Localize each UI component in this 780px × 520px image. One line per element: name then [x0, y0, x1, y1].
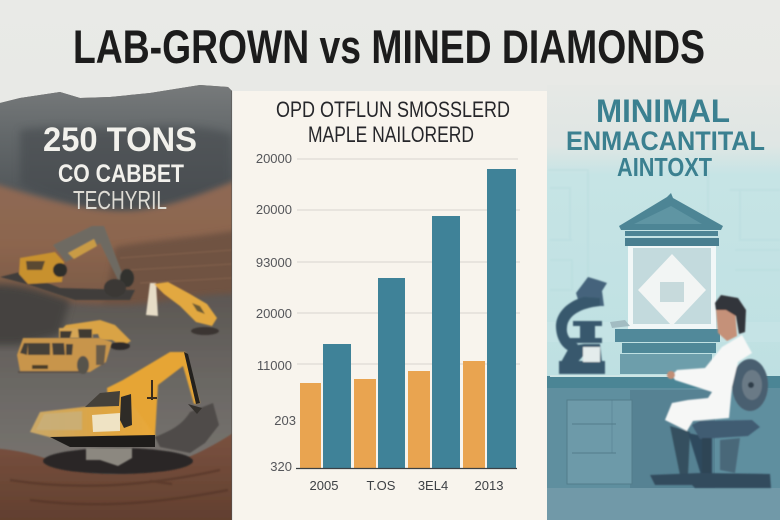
floor: [547, 488, 780, 520]
callout: minimal environmental: ENMACANTITAL: [566, 126, 765, 156]
gridlines: [297, 159, 520, 364]
excavator: large foreground: [30, 352, 219, 474]
x axis labels: 2005: [310, 478, 338, 493]
dirt pile: [155, 403, 219, 453]
quarry floor: [0, 293, 232, 458]
panel edge: [231, 90, 232, 520]
light panel: [92, 413, 120, 432]
x axis labels: 2013: [475, 478, 503, 493]
drawers: [567, 400, 632, 484]
microscope: [556, 277, 607, 374]
chart heading: MAPLE NAILORERD: [308, 122, 474, 147]
callout: 250 tons: [44, 127, 196, 210]
chair seat: [692, 420, 760, 439]
callout: minimal environmental: MINIMAL: [596, 93, 730, 129]
dark cloud band: [20, 126, 232, 215]
base layer: [0, 85, 232, 103]
wall panels: [548, 170, 780, 300]
excavator: upper left: [0, 226, 135, 300]
scientist: [650, 295, 771, 488]
legs: [670, 426, 690, 475]
callout: 250 tons: CO CABBET: [58, 160, 184, 188]
y axis labels: 20000: [256, 202, 292, 217]
y axis labels: 203: [274, 413, 296, 428]
lab desk: [547, 375, 780, 520]
diamond display case: [610, 193, 723, 374]
bar chart: [296, 169, 517, 468]
callout: minimal environmental: [566, 93, 765, 182]
x axis labels: 3EL4: [418, 478, 448, 493]
callout: 250 tons: TECHYRIL: [73, 185, 167, 215]
y axis labels: 11000: [257, 358, 292, 373]
y axis labels: 20000: [256, 306, 292, 321]
foreground mud: [0, 434, 232, 520]
truck: front: [17, 338, 112, 374]
y axis labels: [256, 151, 296, 474]
cab window: [85, 391, 120, 407]
y axis labels: 20000: [256, 151, 292, 166]
coat: [665, 335, 752, 431]
sky: [0, 85, 232, 208]
head: [716, 310, 737, 341]
chart heading: [276, 97, 510, 147]
boom: [107, 352, 200, 437]
terrace bands: [108, 230, 232, 302]
y axis labels: 320: [270, 459, 292, 474]
panel: mining scene: [0, 85, 232, 520]
callout: minimal environmental: AINTOXT: [617, 152, 712, 182]
chair base: [650, 473, 771, 488]
chart heading: OPD OTFLUN SMOSSLERD: [276, 97, 510, 122]
chair: [732, 359, 768, 411]
hull: [30, 405, 155, 439]
hatch: [120, 394, 132, 428]
truck: rear: [59, 320, 131, 350]
excavator: upper right: [146, 282, 219, 335]
x axis labels: [310, 478, 503, 493]
brown hillside: [0, 180, 232, 306]
x axis labels: T.OS: [367, 478, 396, 493]
callout: 250 tons: 250 TONS: [43, 121, 197, 159]
panel: chart: [233, 91, 547, 520]
panel: laboratory scene: [547, 85, 780, 520]
undercarriage: [50, 435, 155, 447]
y axis labels: 93000: [256, 255, 292, 270]
